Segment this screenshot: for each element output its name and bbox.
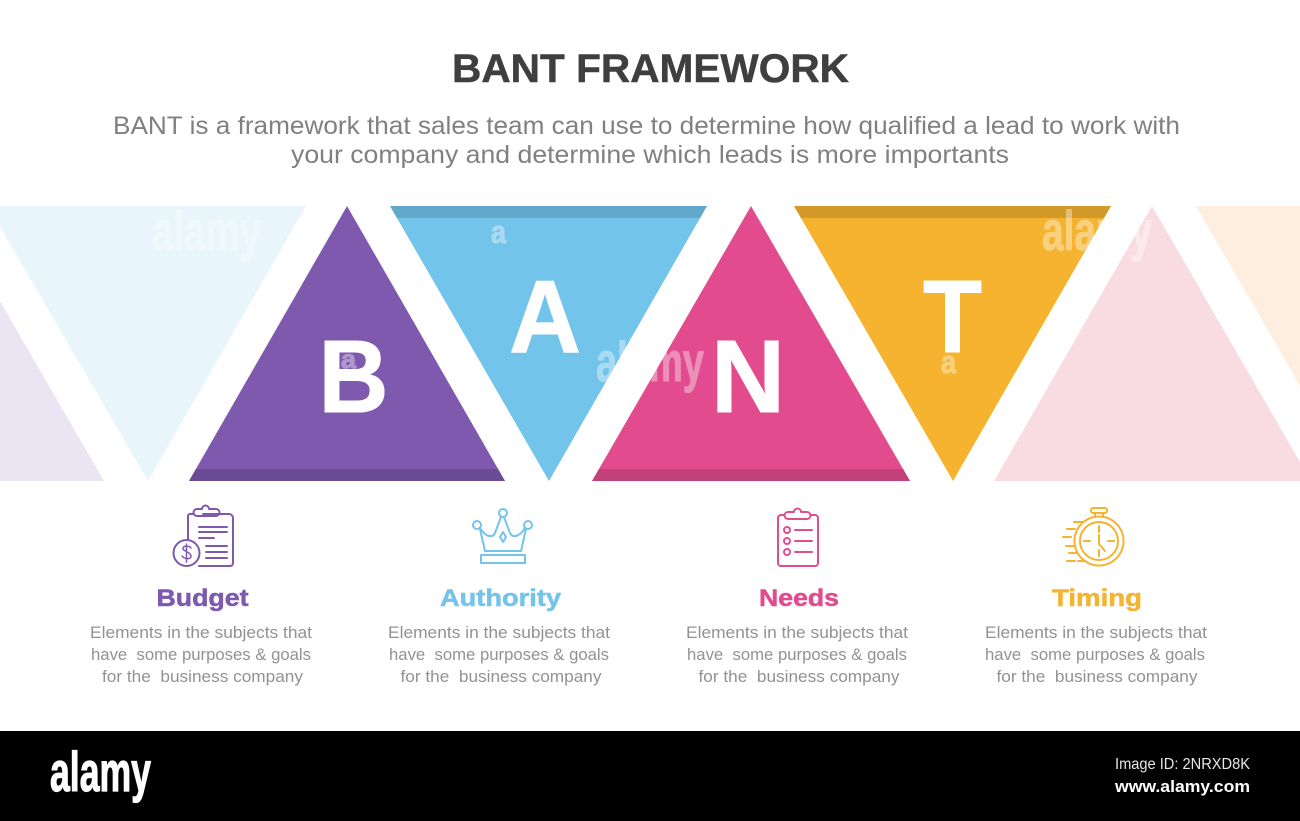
column: Budget <box>90 585 312 686</box>
faded triangle: lavender left <box>0 206 104 481</box>
column: Timing <box>985 585 1207 686</box>
icon: authority crown <box>473 509 532 563</box>
triangle: T: T <box>923 259 982 374</box>
watermarks <box>152 199 1152 393</box>
triangle: B: B <box>318 319 388 434</box>
footer bar <box>0 731 1300 821</box>
triangle: A <box>390 206 707 481</box>
column: Authority: have some purposes & goals <box>389 645 609 664</box>
column: Needs: have some purposes & goals <box>687 645 907 664</box>
subtitle: your company and determine which leads is more importants <box>291 141 1009 169</box>
watermarks: alamy <box>1042 199 1152 262</box>
column: Authority: for the business company <box>400 667 602 686</box>
column: Needs: Needs <box>759 585 839 612</box>
column: Budget: Elements in the subjects that <box>90 623 312 642</box>
image id: Image ID: 2NRXD8K <box>1115 756 1250 773</box>
column: Needs <box>686 585 908 686</box>
watermarks: alamy <box>152 199 261 262</box>
watermarks: a <box>341 344 357 374</box>
icon: needs checklist <box>778 509 818 566</box>
column: Timing: for the business company <box>996 667 1198 686</box>
alamy logo: alamy <box>50 740 151 803</box>
column: Timing: Elements in the subjects that <box>985 623 1207 642</box>
website: www.alamy.com <box>1114 778 1250 796</box>
subtitle <box>113 112 1180 169</box>
triangle: A: A <box>509 259 581 374</box>
column: Budget: have some purposes & goals <box>91 645 311 664</box>
triangle: N: N <box>711 319 785 434</box>
column: Authority <box>388 585 610 686</box>
column: Budget: for the business company <box>102 667 303 686</box>
triangle: B <box>189 206 505 481</box>
watermarks: a <box>491 214 506 250</box>
title: BANT FRAMEWORK <box>452 47 849 91</box>
watermarks: alamy <box>596 330 704 393</box>
faded triangle: light blue left <box>0 206 306 481</box>
faded triangle: peach right <box>1196 206 1300 481</box>
triangle: N <box>592 206 910 481</box>
watermarks: a <box>941 344 956 380</box>
column: Timing: have some purposes & goals <box>985 645 1205 664</box>
column: Budget: Budget <box>156 585 249 612</box>
column: Authority: Elements in the subjects that <box>388 623 610 642</box>
icon: budget clipboard with dollar <box>174 506 233 566</box>
icon: timing stopwatch <box>1063 508 1124 566</box>
column: Needs: for the business company <box>698 667 900 686</box>
triangle: T <box>794 206 1111 481</box>
faded triangle: pale pink right <box>994 206 1300 481</box>
subtitle: BANT is a framework that sales team can use to determine how qualified a lead to work with <box>113 112 1180 140</box>
column: Authority: Authority <box>440 585 562 612</box>
column: Timing: Timing <box>1052 585 1142 612</box>
column: Needs: Elements in the subjects that <box>686 623 908 642</box>
